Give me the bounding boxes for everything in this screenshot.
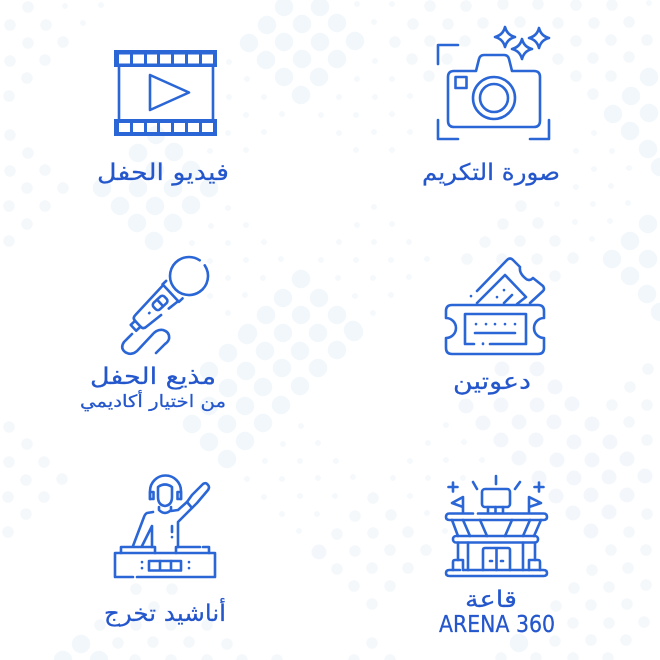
panel: ceremony host	[80, 250, 226, 412]
label: ceremony host: مذيع الحفل	[90, 364, 216, 390]
panel: Arena 360 hall	[439, 476, 555, 638]
label: ARENA 360: ARENA 360	[439, 612, 555, 638]
icon: film strip with play	[114, 50, 217, 136]
label: award photo: صورة التكريم	[422, 160, 560, 186]
icon: camera with sparkles	[438, 27, 549, 139]
label: graduation anthems: أناشيد تخرج	[104, 598, 226, 627]
sublabel: academic selection: من اختيار أكاديمي	[80, 390, 226, 412]
icon: tickets	[446, 258, 544, 354]
panel: two invitations	[446, 258, 544, 395]
panel: award photo	[422, 27, 560, 186]
label: ceremony video: فيديو الحفل	[97, 160, 229, 186]
label: two invitations: دعوتين	[453, 369, 531, 395]
label: hall: قاعة	[465, 587, 517, 613]
icon: arena building	[446, 476, 547, 576]
panel: graduation anthems	[104, 475, 226, 627]
icon: DJ at decks	[115, 475, 215, 577]
icon: microphone	[122, 250, 215, 354]
panel: ceremony video	[97, 50, 229, 186]
